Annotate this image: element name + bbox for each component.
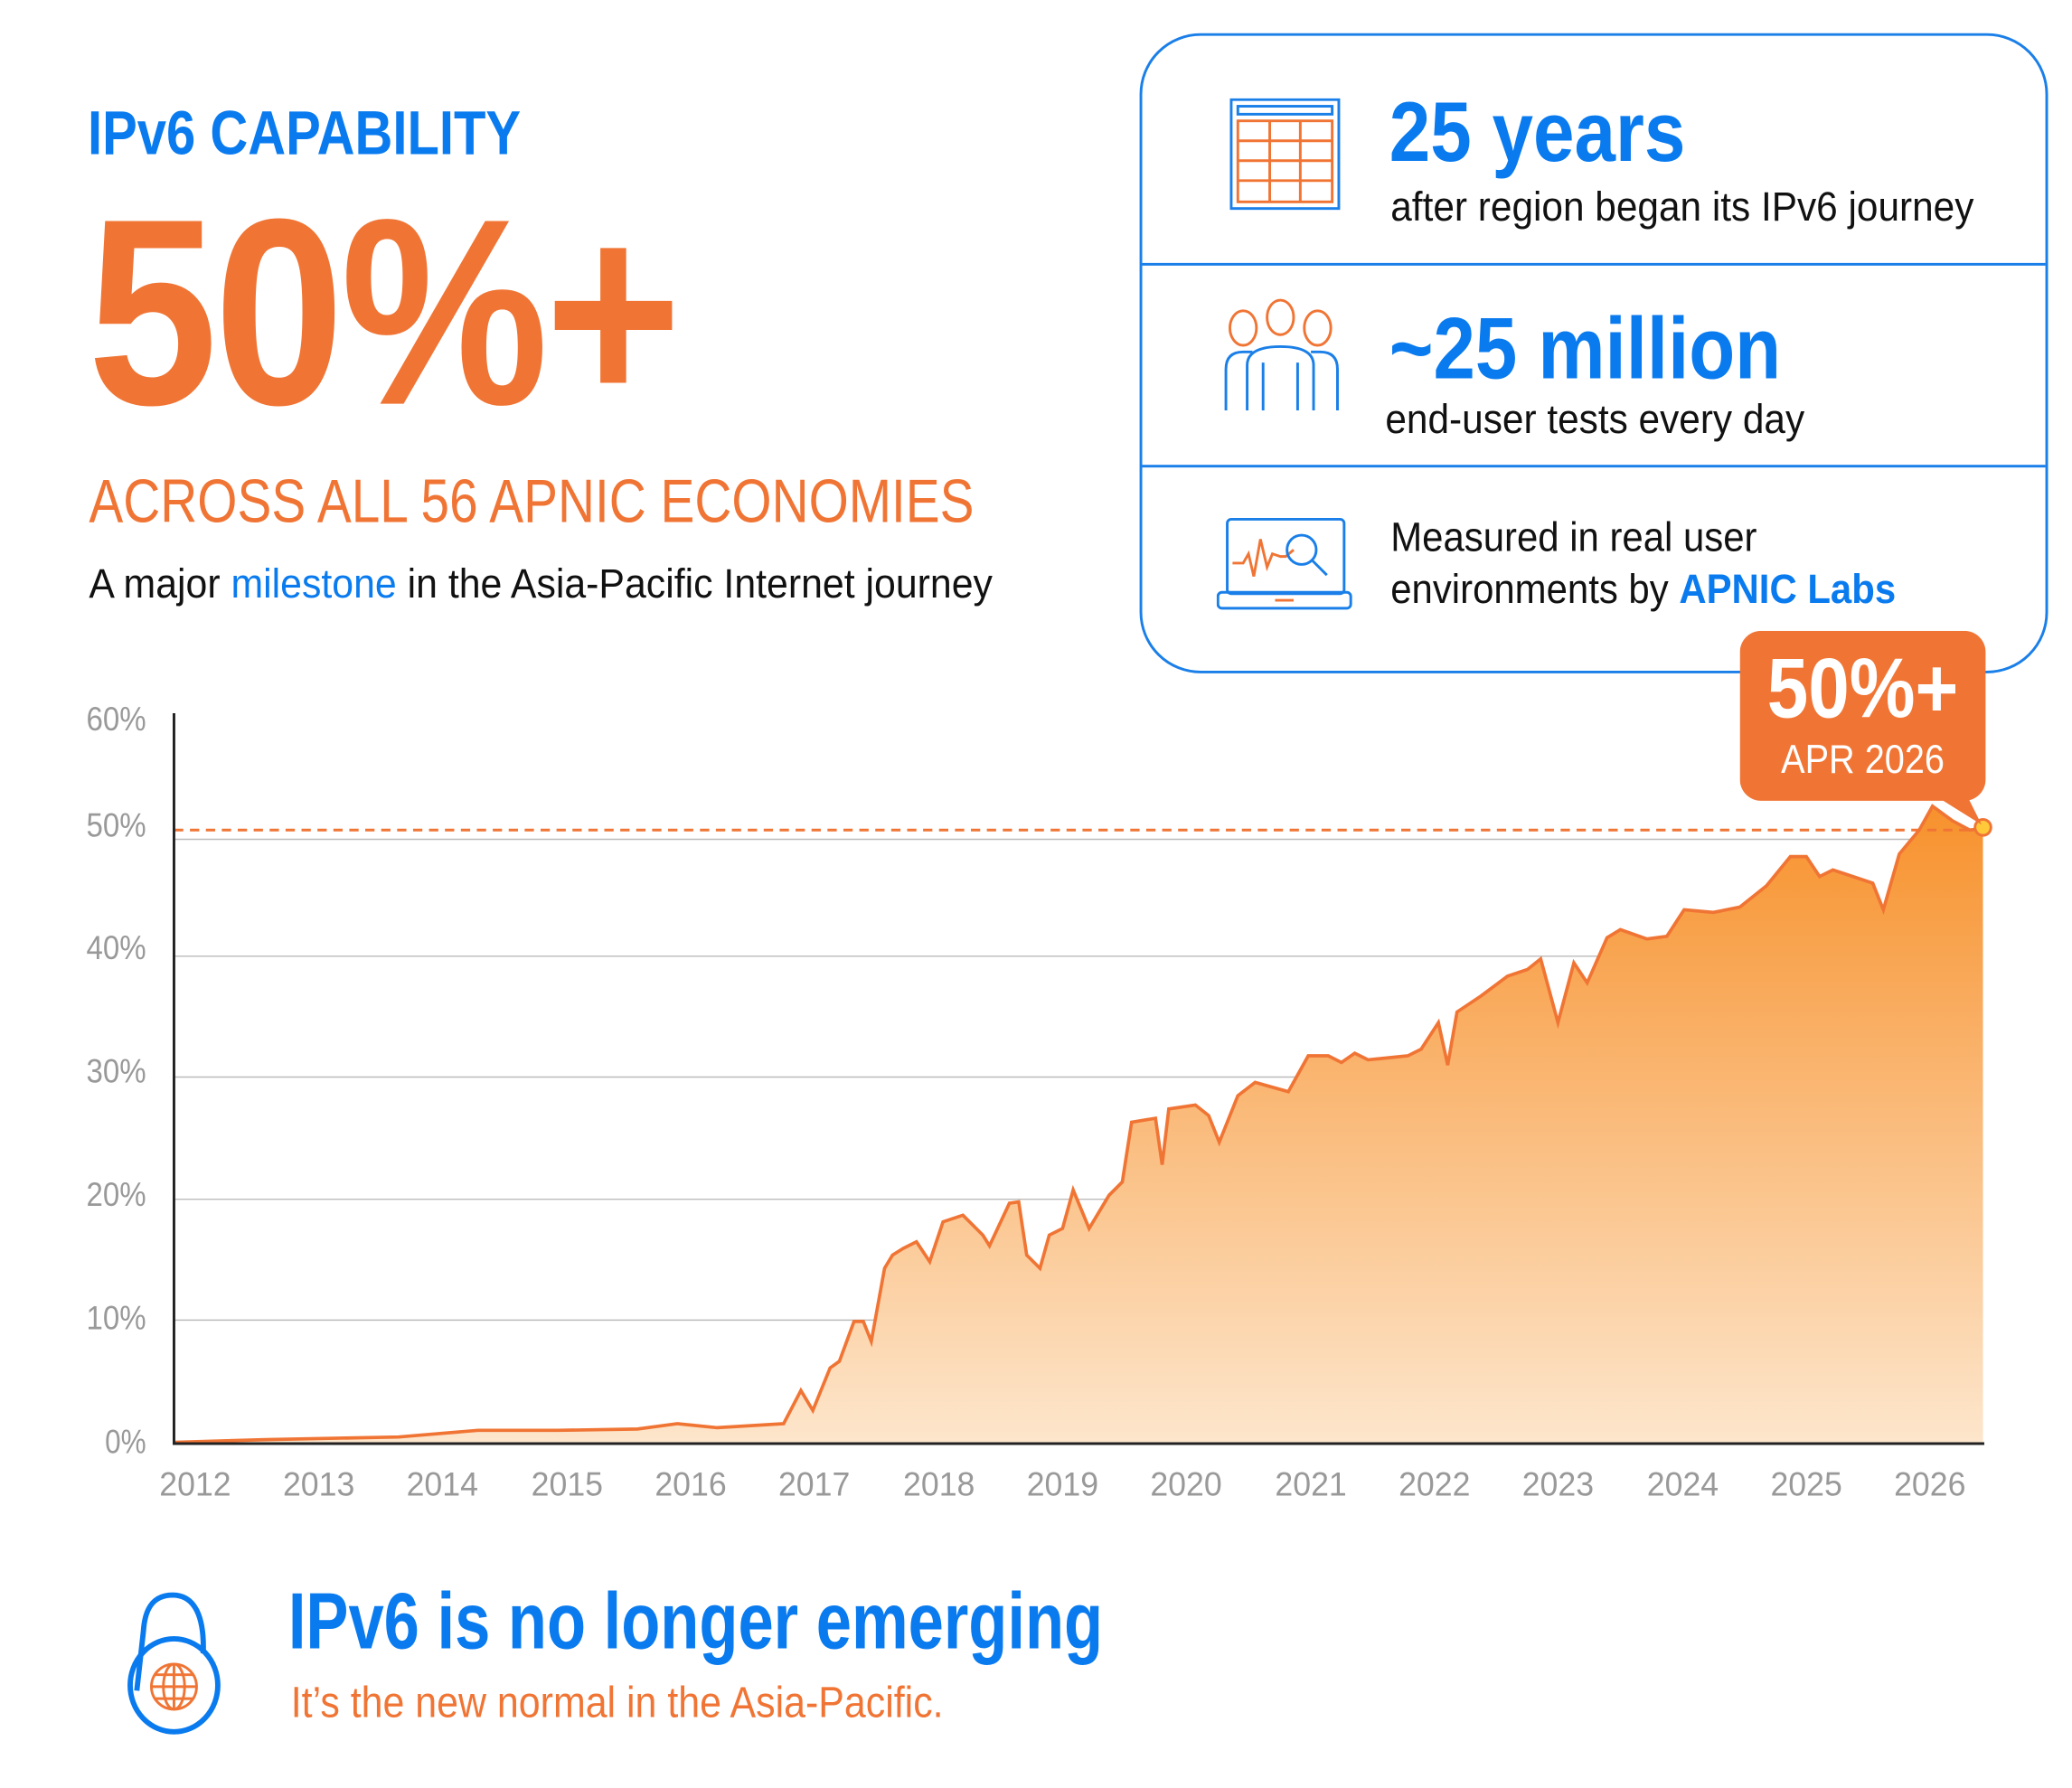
chart: IPv6 capability over time: [86, 701, 1992, 1502]
y-axis labels: 20%: [86, 1176, 146, 1213]
stat: ~25 million: ~25 million: [1389, 299, 1781, 397]
stat: 25 years: 25 years: [1389, 84, 1685, 179]
text: milestone: A major milestone in the Asia-Pacific Internet journey: [89, 560, 993, 607]
text: measured by APNIC Labs: environments by APNIC Labs: [1390, 566, 1896, 612]
text: measured by APNIC Labs: [1390, 514, 1896, 612]
callout: 50%+ APR 2026: APR 2026: [1781, 739, 1945, 782]
y-axis labels: 60%: [86, 701, 146, 738]
heading: IPv6 capability: IPv6 CAPABILITY: [88, 97, 521, 167]
x-axis labels: 2016: [655, 1465, 727, 1502]
x-axis labels: 2022: [1399, 1465, 1470, 1502]
x-axis labels: 2019: [1027, 1465, 1098, 1502]
area: capability series: [174, 806, 1983, 1443]
y-axis labels: 50%: [86, 807, 146, 844]
y-axis labels: 40%: [86, 929, 146, 966]
x-axis labels: [159, 1465, 1965, 1502]
x-axis labels: 2014: [407, 1465, 478, 1502]
panel: stats card: [1140, 33, 2048, 673]
x-axis labels: 2021: [1275, 1465, 1347, 1502]
callout: 50%+ APR 2026: [1739, 631, 1985, 824]
text: end-user tests: end-user tests every day: [1385, 396, 1804, 442]
icon: people: [1224, 298, 1339, 410]
x-axis labels: 2024: [1647, 1465, 1719, 1502]
icon: laptop monitor: [1217, 518, 1352, 609]
x-axis labels: 2026: [1894, 1465, 1965, 1502]
text: measured by APNIC Labs: Measured in real user: [1390, 514, 1757, 560]
x-axis labels: 2012: [159, 1465, 231, 1502]
x-axis labels: 2018: [903, 1465, 975, 1502]
y-axis labels: [86, 701, 146, 1460]
big number 50%+: 50%+: [88, 165, 678, 461]
subheading: across all 56 APNIC economies: ACROSS ALL 56 APNIC ECONOMIES: [89, 466, 975, 535]
icon: IPv6 lock with globe: [127, 1593, 221, 1735]
x-axis labels: 2017: [778, 1465, 850, 1502]
x-axis labels: 2025: [1770, 1465, 1842, 1502]
y-axis labels: 30%: [86, 1052, 146, 1089]
x-axis labels: 2023: [1522, 1465, 1594, 1502]
x-axis labels: 2015: [532, 1465, 603, 1502]
marker: latest point: [1975, 819, 1991, 835]
icon: calendar: [1229, 98, 1340, 210]
callout: 50%+ APR 2026: 50%+: [1767, 640, 1958, 736]
y-axis labels: 10%: [86, 1300, 146, 1337]
text: after region began: after region began its IPv6 journey: [1390, 184, 1973, 230]
y-axis labels: 0%: [105, 1423, 146, 1460]
subtitle: new normal: It’s the new normal in the Asia-Pacific.: [291, 1678, 944, 1727]
x-axis labels: 2020: [1150, 1465, 1222, 1502]
x-axis labels: 2013: [283, 1465, 354, 1502]
heading: IPv6 is no longer emerging: IPv6 is no longer emerging: [288, 1576, 1103, 1665]
